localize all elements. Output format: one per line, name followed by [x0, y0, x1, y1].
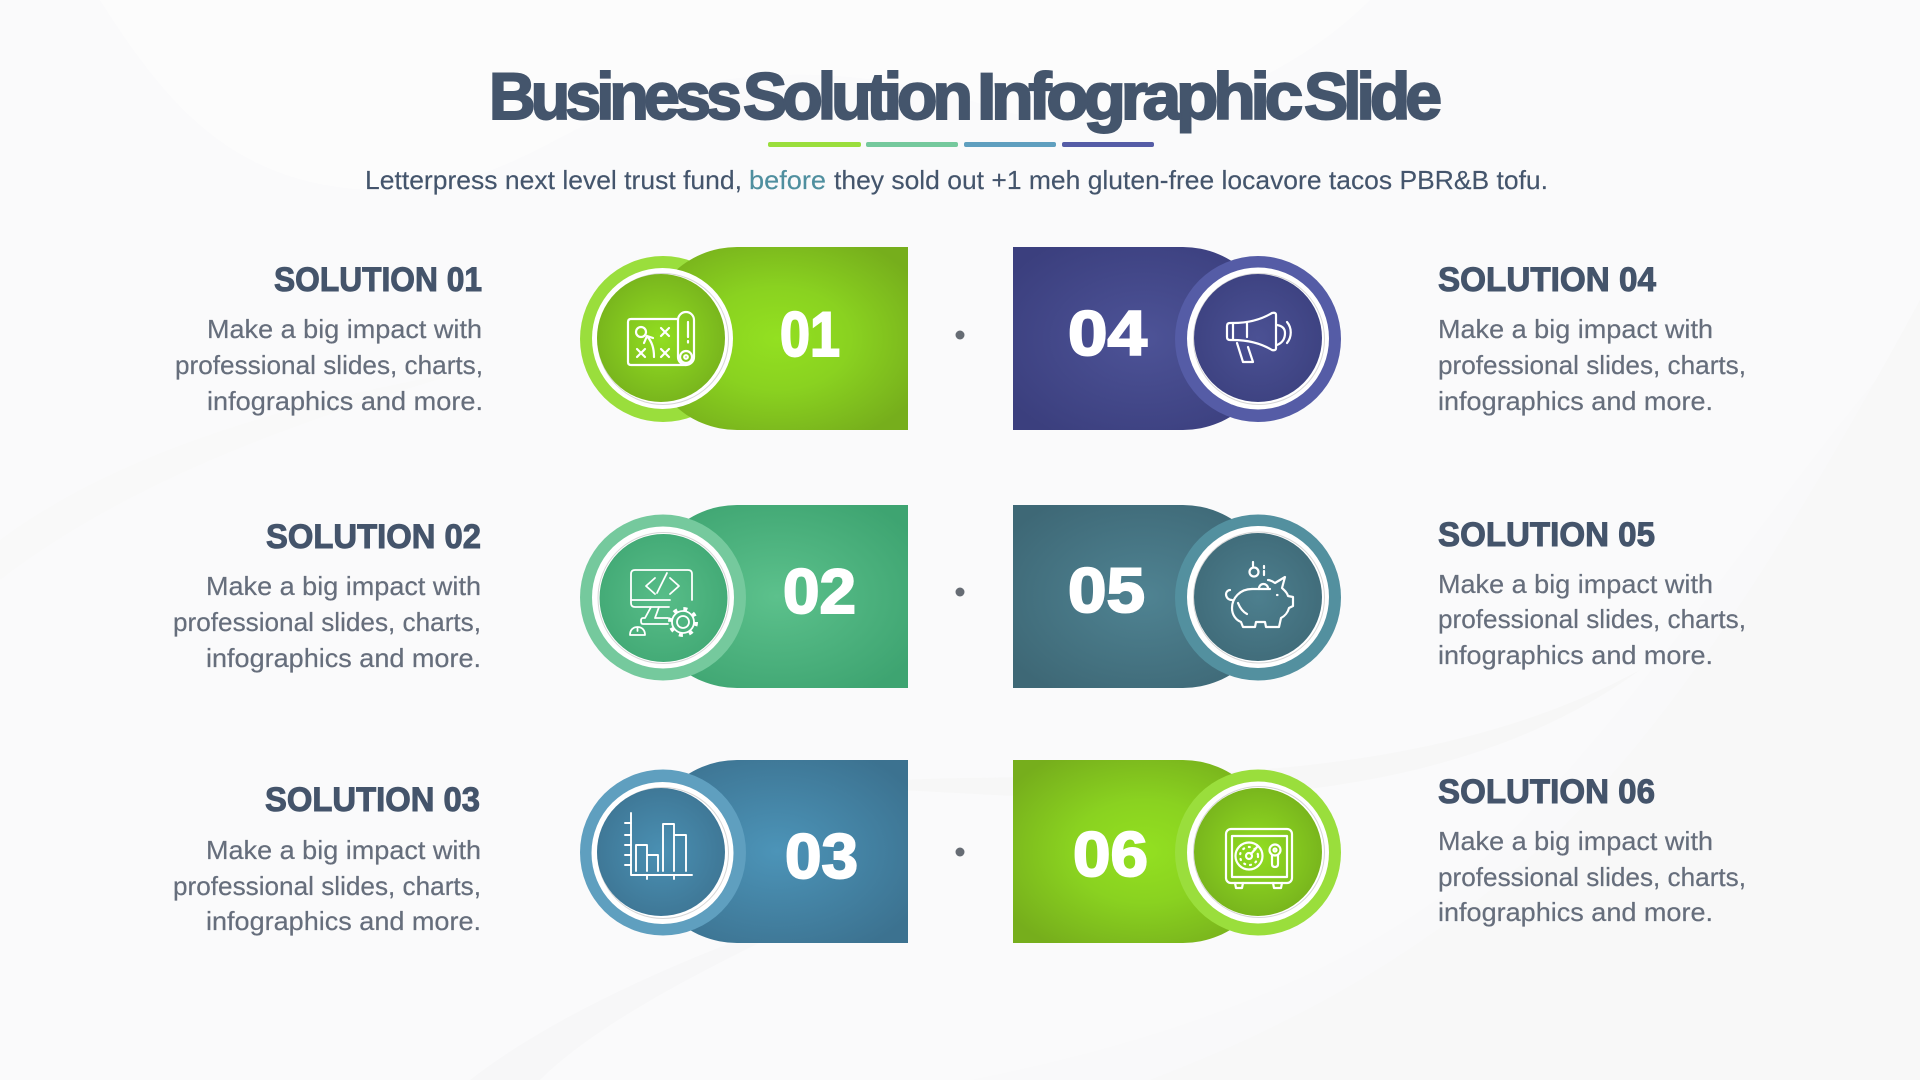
description: solution 02: [173, 571, 481, 673]
heading: solution 04: SOLUTION 04: [1438, 261, 1656, 299]
title: Slide: [1304, 59, 1440, 133]
pill 01: [646, 247, 908, 430]
description: solution 01: Make a big impact with: [207, 314, 482, 344]
panel: solution 03 text: [173, 781, 481, 936]
pill 02: [646, 505, 908, 688]
panel: badge 06: [1013, 760, 1341, 943]
panel: badge 05: [1013, 505, 1341, 688]
icon: safe: [1226, 829, 1292, 888]
panel: badge 02: [580, 505, 908, 688]
number 04: 04: [1068, 299, 1147, 369]
description: solution 01: [175, 314, 483, 416]
icon: bar chart: [625, 813, 692, 879]
title underline: [768, 142, 1154, 147]
panel: badge 01: [580, 247, 908, 430]
title: [489, 59, 1440, 133]
description: solution 05: Make a big impact with: [1438, 569, 1713, 599]
icon: map: [628, 312, 694, 365]
pill 06: [1013, 760, 1274, 943]
heading: solution 01: SOLUTION 01: [274, 261, 482, 299]
pill 05: [1013, 505, 1274, 688]
heading: solution 03: SOLUTION 03: [265, 781, 480, 819]
number 03: 03: [785, 822, 858, 892]
number 02: 02: [783, 557, 856, 627]
panel: solution 02 text: [173, 518, 481, 673]
title: Infographic: [977, 59, 1301, 133]
panel: solution 04 text: [1438, 261, 1746, 416]
description: solution 03: infographics and more.: [206, 906, 481, 936]
description: solution 04: Make a big impact with: [1438, 314, 1713, 344]
icon: piggy bank: [1226, 562, 1293, 627]
title: Business: [489, 59, 739, 133]
panel: badge 04: [1013, 247, 1341, 430]
subtitle: they sold out +1 meh gluten-free locavore tacos PBR&B tofu.: [834, 165, 1548, 195]
number 06: 06: [1073, 820, 1148, 890]
heading: solution 06: SOLUTION 06: [1438, 773, 1655, 811]
description: solution 04: infographics and more.: [1438, 386, 1713, 416]
pill 03: [646, 760, 908, 943]
description: solution 06: Make a big impact with: [1438, 826, 1713, 856]
number 05: 05: [1068, 556, 1145, 626]
number 01: 01: [780, 300, 840, 370]
description: solution 03: [173, 835, 481, 936]
title: Solution: [743, 59, 970, 133]
description: solution 01: infographics and more.: [207, 386, 483, 416]
description: solution 05: professional slides, charts,: [1438, 604, 1746, 634]
panel: solution 06 text: [1438, 773, 1746, 927]
description: solution 02: Make a big impact with: [206, 571, 481, 601]
subtitle: before: [749, 165, 826, 195]
separator dot: [956, 588, 964, 596]
panel: solution 01 text: [175, 261, 483, 416]
description: solution 06: infographics and more.: [1438, 897, 1713, 927]
separator dot: [956, 330, 964, 340]
description: solution 02: infographics and more.: [206, 643, 481, 673]
description: solution 05: [1438, 569, 1746, 670]
panel: badge 03: [580, 760, 908, 943]
description: solution 03: Make a big impact with: [206, 835, 481, 865]
description: solution 05: infographics and more.: [1438, 640, 1713, 670]
description: solution 01: professional slides, charts,: [175, 350, 483, 380]
description: solution 06: [1438, 826, 1746, 927]
icon: monitor with gear: [630, 570, 696, 635]
description: solution 06: professional slides, charts,: [1438, 862, 1746, 892]
subtitle: [365, 165, 1548, 195]
description: solution 02: professional slides, charts,: [173, 607, 481, 637]
description: solution 03: professional slides, charts,: [173, 871, 481, 901]
subtitle: Letterpress next level trust fund,: [365, 165, 742, 195]
panel: solution 05 text: [1438, 516, 1746, 670]
heading: solution 05: SOLUTION 05: [1438, 516, 1655, 554]
pill 04: [1013, 247, 1274, 430]
icon: megaphone: [1227, 313, 1291, 362]
description: solution 04: professional slides, charts,: [1438, 350, 1746, 380]
description: solution 04: [1438, 314, 1746, 416]
heading: solution 02: SOLUTION 02: [266, 518, 481, 556]
separator dot: [956, 848, 964, 856]
